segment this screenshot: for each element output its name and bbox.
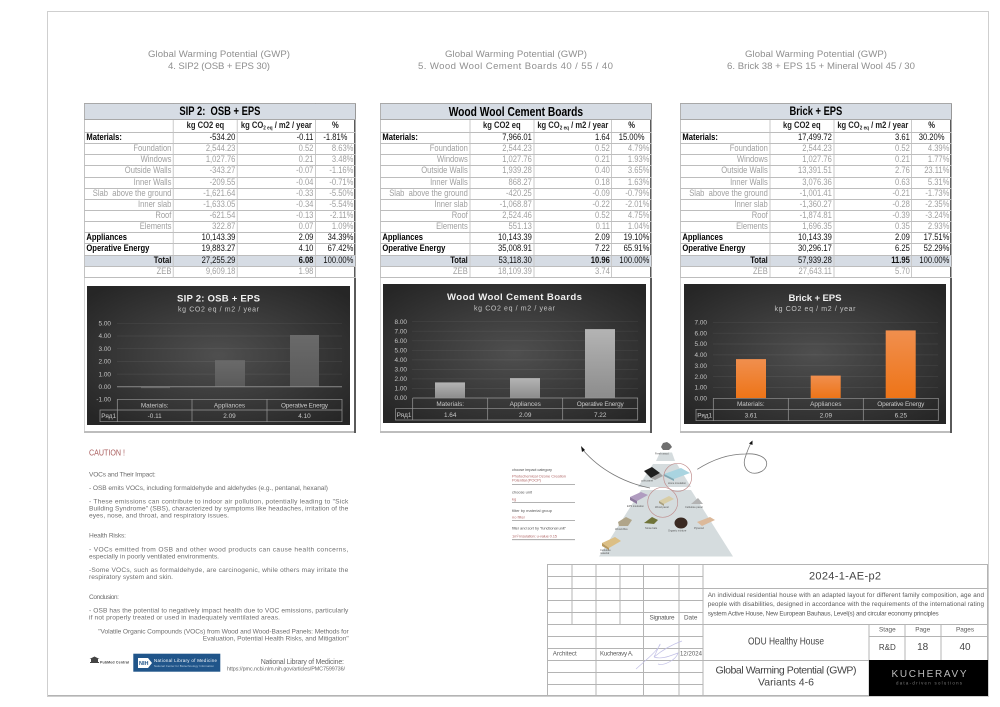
y axis: 1.00 [395,386,407,393]
heading: variant 5 [418,49,613,72]
stage, page and pages: R&D [879,643,896,652]
y axis: 1.00 [695,385,707,392]
data table: 6.25 [895,412,907,419]
material: beige block: Wood panel [655,505,669,509]
logo: National Library of Medicine [133,654,220,672]
data table: -0.11 [148,413,162,420]
y axis: 6.00 [695,330,707,337]
legend: filter settings: choose unit [512,489,533,494]
y axis: 0.00 [395,395,407,402]
data table: Materials: [436,401,464,408]
y axis: 5.00 [395,348,407,354]
bar chart: Brick + EPS [684,284,946,424]
data table: Wood Wool Cement Boards [380,103,652,278]
heading: variant 4: Global Warming Potential (GWP) [148,49,290,60]
project description [708,592,984,618]
y axis: 1.00 [99,371,111,378]
source citation [227,659,346,672]
panel: SIP 2 OSB + EPS [84,103,356,433]
chart title: Brick + EPS [788,293,842,304]
chart title: SIP 2: OSB + EPS [177,294,261,304]
bars [435,329,615,398]
data table: Appliances [810,401,841,408]
y axis: 3.00 [395,367,407,374]
health risks: Health Risks: [89,533,126,540]
data table: Brick + EPS: kg CO2 eq [783,120,821,131]
data table: Wood Wool Cement Boards: kg CO2 eq [483,120,521,131]
signature header labels [650,614,698,621]
data table: Ряд1 [101,413,117,420]
legend: filter settings: no filter [512,515,526,520]
health risks: -Some VOCs, such as formaldehyde, are carcinogenic, while others may irritate the [89,567,349,574]
y axis: 2.00 [695,374,707,381]
data table: Appliances [214,402,245,409]
conclusion: Conclusion: [89,594,119,601]
data table [100,399,342,422]
logo: National Library of Medicine: National Center for Biotechnology Information [154,664,214,668]
source citation: https://pmc.ncbi.nlm.nih.gov/articles/PMC7599736/ [227,666,346,672]
data table: SIP 2: SIP 2: OSB + EPS [179,105,260,118]
panel: Brick + EPS [680,103,952,433]
health risks: especially in poorly ventilated environments. [89,553,219,560]
legend: filter settings: filter and sort by "functional unit" [512,526,567,530]
data table: 2.09 [820,412,832,419]
legend: filter settings: filter by material group [512,508,553,513]
VOCs and their impact: - OSB emits VOCs, including formaldehyde and aldehydes (e.g., pentanal, hexanal) [89,485,328,492]
sheet title [716,665,856,688]
chart title: kg CO2 eq / m2 / year [774,306,856,313]
y axis: 5.00 [99,320,111,328]
VOCs and their impact: VOCs and Their Impact: [89,471,156,478]
material: lower row blocks: Plywood [694,526,704,530]
y axis: 3.00 [99,346,111,353]
signature header labels: Date [684,614,698,621]
material: gray fibre: Cellulose panel [685,505,703,509]
material: yellow block: Cellulose [600,548,611,552]
project name: ODU Healthy House [748,636,824,648]
y axis: 5.00 [695,341,707,348]
y axis: 4.00 [99,333,111,340]
pyramid of materials [599,442,733,556]
project code: 2024-1-AE-p2 [809,571,881,583]
heading: variant 6: 6. Brick 38 + EPS 15 + Mineral Wool 45 / 30 [727,61,915,72]
material: blue insulation: stone insulation [668,481,687,485]
data table: Wood Wool Cement Boards: kg CO2 eq / m2 / year [537,120,608,132]
data table: Brick + EPS: Brick + EPS [790,105,842,118]
architect row: 12/2024 [680,652,703,658]
chart title [447,292,582,312]
chart title: Wood Wool Cement Boards [447,292,582,303]
material: lower row blocks: Organic mixture [668,528,687,532]
sheet title: Global Warming Potential (GWP) [716,665,856,677]
legend: filter settings: kg [512,496,516,502]
heading: variant 5: Global Warming Potential (GWP) [445,49,587,60]
icon: signature scribble [636,641,682,669]
data table: SIP 2: kg CO2 eq / m2 / year [241,120,312,132]
bars [141,335,319,388]
data table: Ряд1 [697,412,713,419]
stage, page and pages: Pages [956,627,974,634]
data table: Operative Energy [877,401,925,408]
chart title [177,294,261,314]
logo: Kucheravy [869,660,988,696]
stage, page and pages: Stage [879,627,896,634]
y axis: 4.00 [695,352,707,359]
y axis: 2.00 [395,376,407,383]
material: lower row blocks: Wood-fibre [615,527,628,531]
architect row [553,651,703,658]
chart title: kg CO2 eq / m2 / year [474,306,556,312]
data table: 2.09 [223,413,236,420]
data table: Materials: [737,401,765,408]
heading: variant 5: 5. Wood Wool Cement Boards 40 / 55 / 40 [418,61,613,72]
heading: variant 6: Global Warming Potential (GWP) [745,49,887,60]
conclusion [89,594,349,622]
data table: SIP 2: % [332,120,339,131]
health risks [89,533,349,581]
stage, page and pages: 18 [917,642,929,653]
data table: 2.09 [519,412,532,419]
architect row: Architect [553,651,577,658]
material: fresh wood: Fresh wood [655,452,669,456]
data table: Operative Energy [281,402,329,409]
caution heading: CAUTION ! [89,448,125,458]
data table: Appliances [510,401,541,408]
logo: National Library of Medicine: NIH [139,661,148,667]
y axis: 7.00 [395,328,407,335]
bar chart: Wood Wool Cement Boards [383,284,646,423]
heading: variant 4: 4. SIP2 (OSB + EPS 30) [168,61,270,72]
signature header labels: Signature [650,614,675,621]
y axis: 6.00 [395,338,407,345]
material: dark block: cork panel [641,478,653,482]
y axis: 0.00 [695,396,707,402]
VOCs and their impact: eyes, nose, and throat, and respiratory issues. [89,513,229,520]
heading: variant 6 [727,49,915,72]
chart title [774,293,856,313]
legend: filter settings: Photochemical Ozone Creation [512,474,566,478]
VOCs and their impact: - These emissions can contribute to indoor air pollution, potentially leading to "Sick [89,499,349,506]
chart title: kg CO2 eq / m2 / year [178,306,260,314]
stage, page and pages: Page [915,627,931,634]
y axis [395,319,638,402]
project description: An individual residential house with an adapted layout for different family composition, age and [708,592,984,599]
material: yellow block [600,537,621,555]
health risks: respiratory system and skin. [89,574,173,581]
pyramid tiers [599,452,733,556]
data table: 3.61 [745,412,757,419]
heading: variant 4 [148,49,290,72]
stage, page and pages: 40 [959,642,971,653]
project description: people with disabilities, designed in accordance with the requirements of the international rating [708,601,984,608]
material: lower row blocks: Straw bale [645,526,658,530]
caution text block [89,448,349,642]
VOCs and their impact: Building Syndrome" (SBS), characterized by symptoms like headaches, irritation of the [89,506,349,513]
conclusion: if not properly treated or used in inadequately ventilated areas. [89,615,280,622]
project description: system Active House, New European Bauhaus, Level(s) and circular economy principles [708,611,939,618]
data table [396,398,638,420]
logo: Kucheravy: KUCHERAVY [892,669,967,680]
source quote: "Volatile Organic Compounds (VOCs) from Wood and Wood-Based Panels: Methods for [98,629,349,636]
health risks: - VOCs emitted from OSB and other wood products can cause health concerns, [89,546,348,553]
y axis: 3.00 [695,363,707,370]
logo: PubMed Central [90,656,129,664]
legend: filter settings: choose impact category [512,467,552,472]
data table: SIP 2 [84,103,356,278]
source quote: Evaluation, Potential Health Risks, and Mitigation" [203,635,349,642]
material: lower row blocks [615,517,715,532]
data table: 7.22 [594,412,607,419]
data table [696,398,938,421]
architect row: Kucheravy A. [600,651,634,658]
data table: Brick + EPS [680,103,952,278]
arrow: to legend [581,446,650,488]
conclusion: - OSB has the potential to negatively impact health due to VOC emissions, particularly [89,608,349,615]
y axis [96,320,342,404]
VOCs and their impact [89,471,349,520]
logo: PubMed Central: PubMed Central [100,660,129,664]
data table: 4.10 [298,413,311,420]
y axis: 7.00 [695,320,707,326]
title block grid [48,564,988,696]
data table: Materials: [141,402,169,409]
highlight circles [664,463,692,491]
data table: SIP 2: kg CO2 eq [187,120,224,131]
data table: Wood Wool Cement Boards: % [628,120,635,131]
source citation: National Library of Medicine: [261,659,344,666]
logo: National Library of Medicine: National Library of Medicine [154,658,218,663]
logo: Kucheravy: data-driven solutions [896,680,963,685]
material: yellow block: material [600,551,610,555]
legend: filter settings: 1m² insulation: u-value 0.15 [512,533,558,538]
y axis: -1.00 [96,397,111,404]
data table: Wood Wool Cement Boards: Wood Wool Cement Boards [449,104,583,119]
data table: Operative Energy [577,401,624,408]
y axis [695,320,938,402]
bars [736,330,916,398]
data table: 1.64 [444,412,457,419]
y axis: 4.00 [395,357,407,364]
arrow: looping to upper right [697,440,767,473]
sheet title: Variants 4-6 [758,676,814,688]
stage, page and pages [879,627,974,653]
y axis: 2.00 [99,359,111,366]
data table: Brick + EPS: kg CO2 eq / m2 / year [837,120,908,132]
title block [48,564,988,696]
legend: filter settings [512,467,575,540]
y axis: 8.00 [395,319,407,326]
legend: filter settings: Potential (POCP) [512,478,542,483]
bar chart: SIP 2 [87,286,350,425]
data table: Ряд1 [397,412,412,419]
data table: Brick + EPS: % [928,120,935,131]
panel: Wood Wool Cement Boards [380,103,652,433]
y axis: 0.00 [99,384,111,391]
source quote [98,629,349,642]
material: purple block: EPS insulation [627,504,644,508]
